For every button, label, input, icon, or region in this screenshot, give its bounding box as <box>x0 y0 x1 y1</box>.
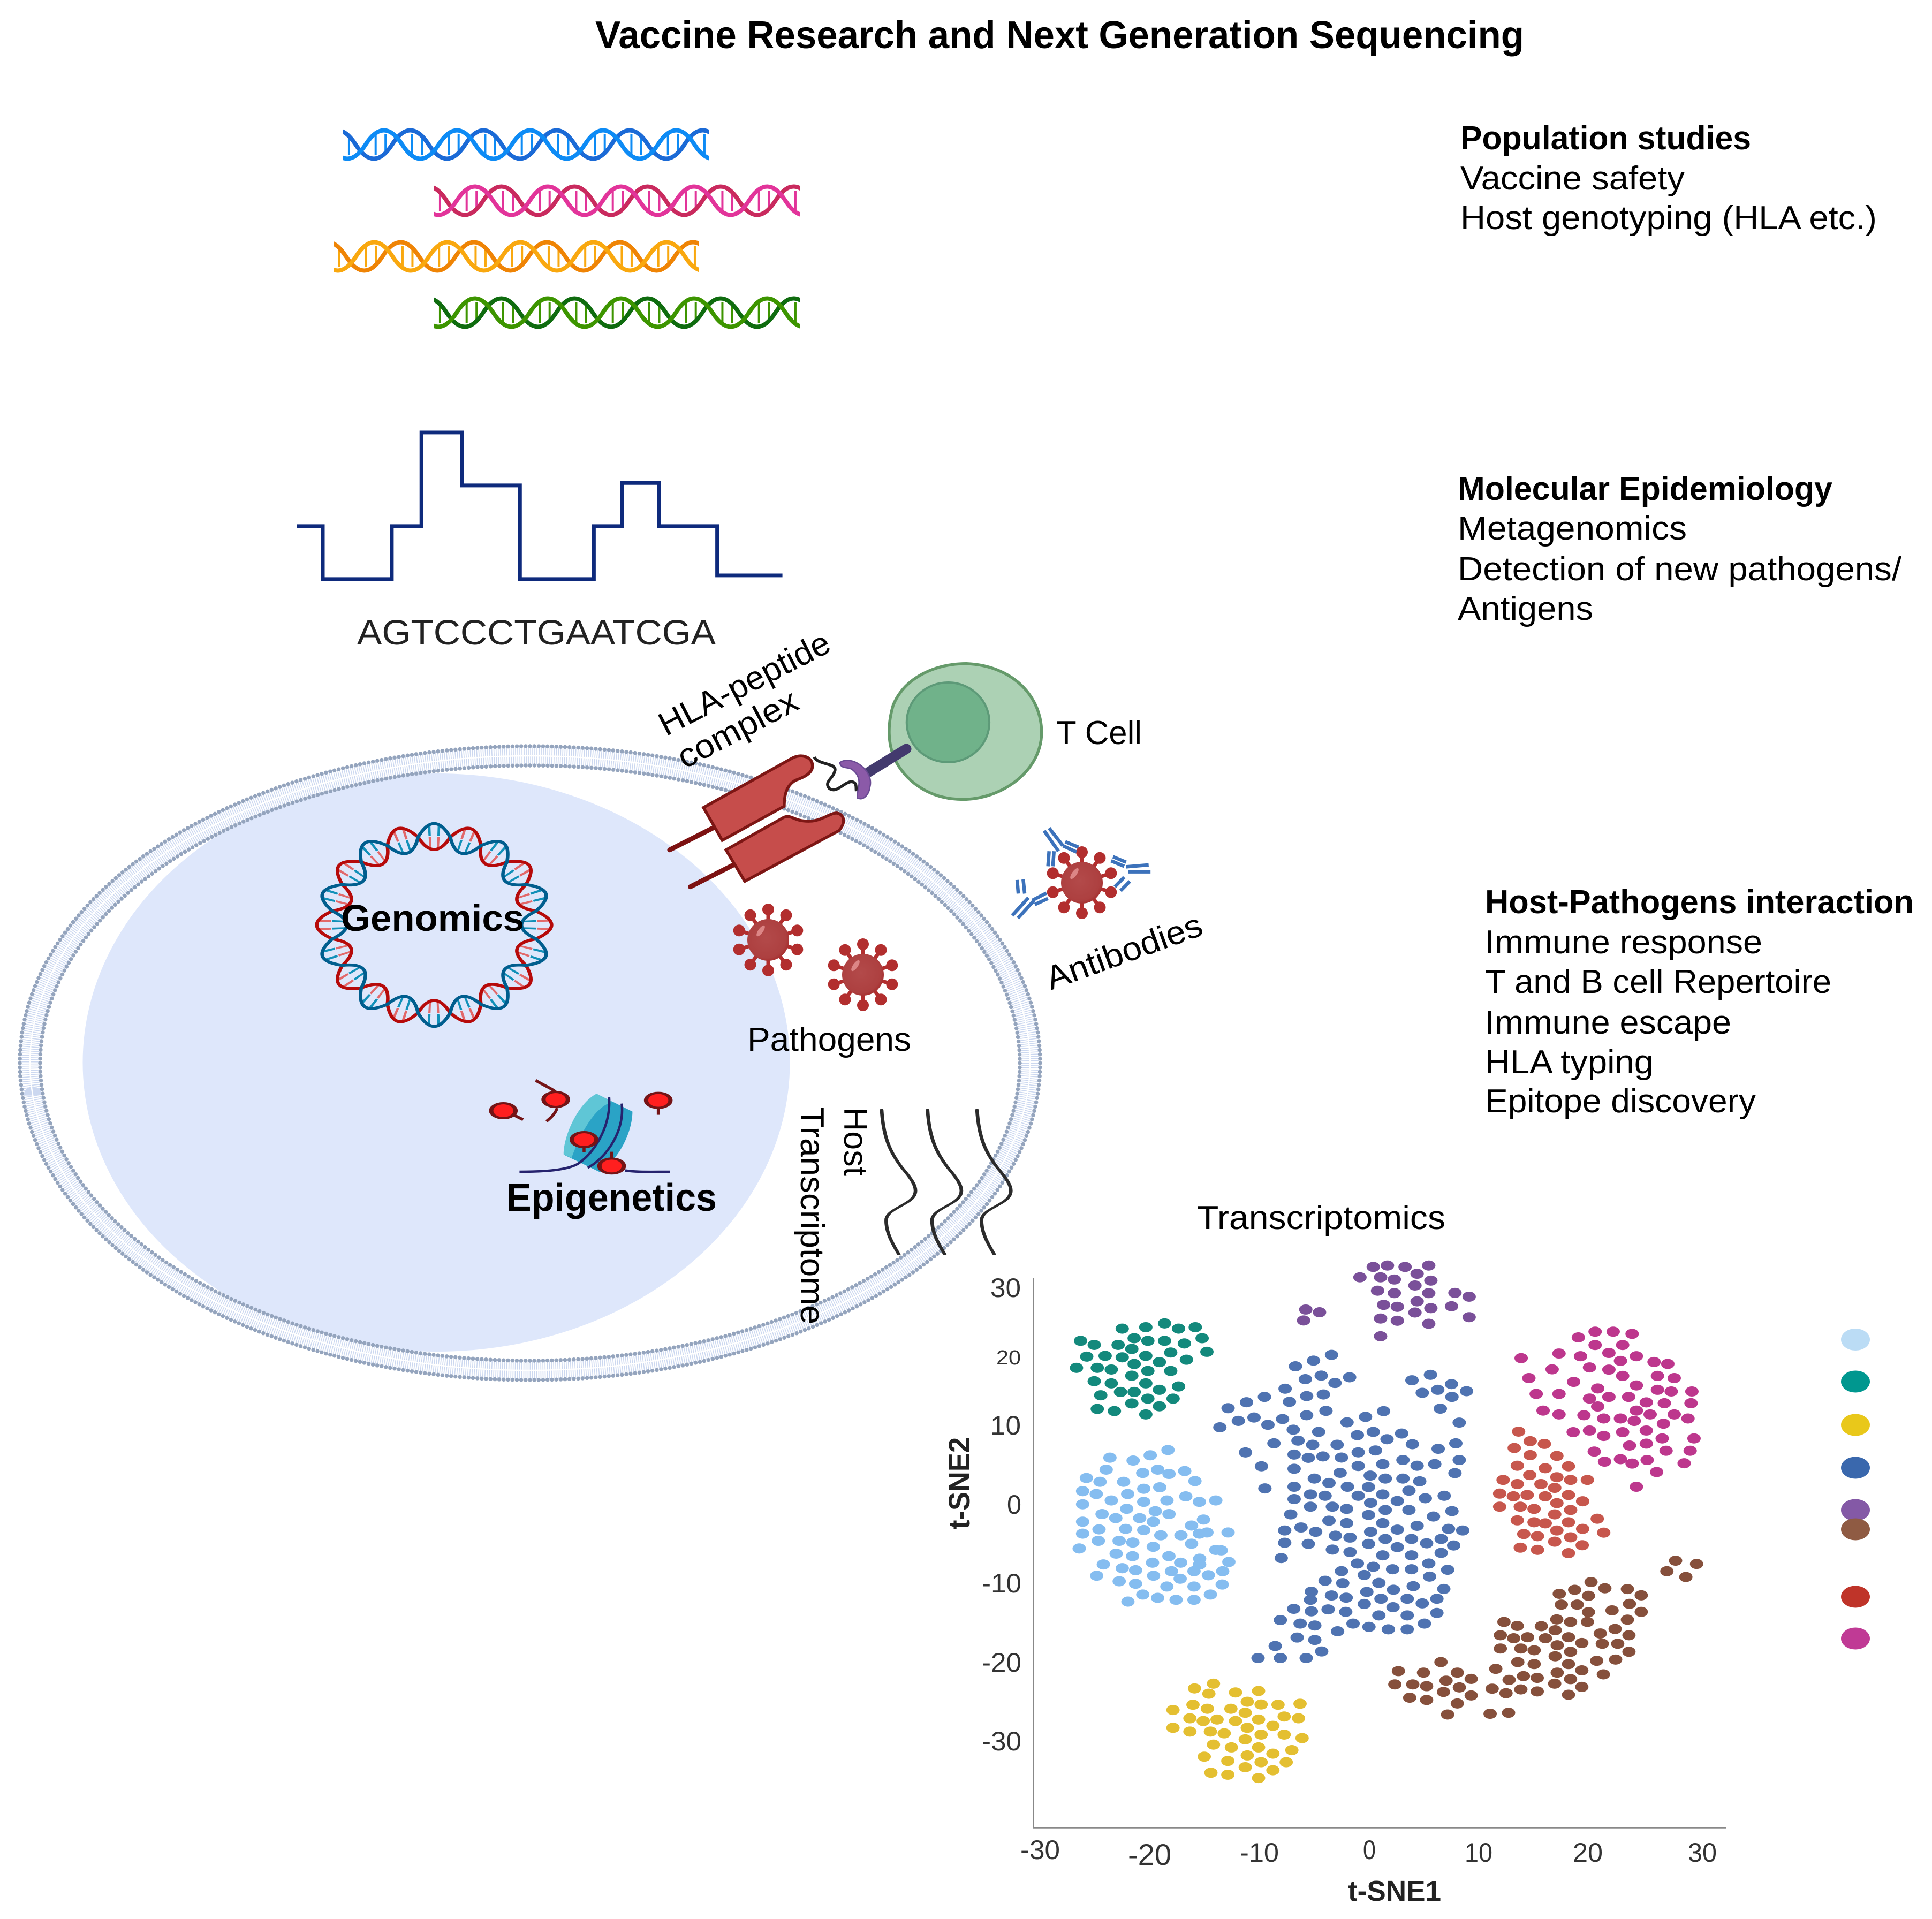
cluster: yellow <box>1173 1683 1302 1778</box>
y axis title: t-SNE2 <box>942 1437 976 1529</box>
cluster: light blue <box>1079 1450 1229 1602</box>
y axis tick labels: 30 <box>990 1273 1021 1303</box>
cluster: brown <box>1395 1561 1696 1715</box>
text block: molecular epidemiology <box>1458 471 1902 627</box>
x axis tick labels: -20 <box>1128 1838 1171 1871</box>
y axis tick labels: 0 <box>1007 1490 1021 1520</box>
cluster: blue <box>1220 1355 1467 1658</box>
text block: host-pathogens interaction: HLA typing <box>1485 1044 1654 1081</box>
text block: molecular epidemiology: Detection of new pathogens/ <box>1458 551 1902 588</box>
x axis tick labels: -10 <box>1240 1838 1279 1868</box>
label: Host Transcriptome: Host <box>837 1107 874 1176</box>
text block: population studies: Vaccine safety <box>1460 160 1685 197</box>
chart: t-SNE scatter plot <box>942 1265 1870 1907</box>
text block: host-pathogens interaction: Immune escape <box>1485 1004 1731 1041</box>
icon: pathogens in cell <box>739 909 892 1005</box>
x axis tick labels: -30 <box>1020 1835 1060 1865</box>
panel: sequencing reads DNA strands <box>283 131 995 327</box>
label: HLA-peptide complex: complex <box>671 682 804 776</box>
x axis tick labels: 30 <box>1688 1838 1717 1868</box>
x axis title: t-SNE1 <box>1348 1875 1441 1907</box>
y axis tick labels: -30 <box>982 1726 1021 1756</box>
icon: pathogen bound by antibodies <box>1012 828 1150 918</box>
text block: host-pathogens interaction: T and B cell Repertoire <box>1485 964 1831 1000</box>
y axis tick labels <box>982 1273 1021 1756</box>
y axis tick labels: -10 <box>982 1568 1021 1598</box>
label: Pathogens: Pathogens <box>747 1021 911 1058</box>
heading: Transcriptomics: Transcriptomics <box>1197 1200 1445 1237</box>
icon: blue DNA strand <box>343 128 709 161</box>
heading: Genomics: Genomics <box>341 897 524 939</box>
y axis tick labels: -20 <box>982 1648 1021 1678</box>
axes <box>1033 1278 1726 1827</box>
x axis tick labels: 10 <box>1465 1838 1492 1868</box>
icon: green DNA strand <box>434 297 800 329</box>
text block: host-pathogens interaction: Epitope discovery <box>1485 1083 1756 1120</box>
text block: host-pathogens interaction: Host-Pathogens interaction <box>1485 884 1914 921</box>
label: T Cell: T Cell <box>1056 715 1142 752</box>
icon: HLA-peptide complex <box>670 756 857 887</box>
icon: orange DNA strand <box>334 240 699 273</box>
text block: host-pathogens interaction: Immune response <box>1485 924 1762 961</box>
chart: sequencing step trace <box>297 433 783 579</box>
icon: T cell with receptor <box>840 664 1042 799</box>
label: Host Transcriptome <box>793 1107 874 1324</box>
x axis tick labels: 20 <box>1573 1838 1603 1868</box>
text block: molecular epidemiology: Metagenomics <box>1458 510 1687 547</box>
title: Vaccine Research and Next Generation Sequencing <box>595 14 1524 57</box>
text: nucleotide sequence: AGTCCCTGAATCGA <box>357 612 716 652</box>
x axis tick labels <box>1020 1835 1717 1871</box>
legend dots <box>1841 1329 1870 1650</box>
panel: host cell <box>20 746 1040 1380</box>
label: Antibodies: Antibodies <box>1041 907 1207 997</box>
text block: population studies: Host genotyping (HLA etc.) <box>1460 200 1877 237</box>
text block: molecular epidemiology: Antigens <box>1458 590 1593 627</box>
cluster: magenta <box>1521 1332 1694 1487</box>
text block: population studies <box>1460 120 1877 237</box>
text block: molecular epidemiology: Molecular Epidemiology <box>1458 471 1833 507</box>
x axis tick labels: 0 <box>1363 1835 1376 1865</box>
cluster: purple <box>1304 1265 1469 1336</box>
y axis tick labels: 10 <box>990 1410 1021 1440</box>
text block: host-pathogens interaction <box>1485 884 1914 1120</box>
icon: pink DNA strand <box>434 184 800 217</box>
nucleus <box>82 773 790 1352</box>
cluster: teal <box>1077 1323 1207 1414</box>
text block: population studies: Population studies <box>1460 120 1751 157</box>
heading: Epigenetics: Epigenetics <box>506 1177 717 1219</box>
icon: nucleosome with histone marks <box>491 1080 670 1173</box>
y axis tick labels: 20 <box>996 1347 1021 1369</box>
label: HLA-peptide complex: HLA-peptide <box>653 624 836 743</box>
icon: circular genome DNA <box>267 780 602 1070</box>
cluster: red <box>1499 1431 1604 1553</box>
cell membrane <box>20 746 1040 1380</box>
label: Host Transcriptome: Transcriptome <box>793 1107 830 1324</box>
icon: host transcripts <box>882 1110 1011 1254</box>
